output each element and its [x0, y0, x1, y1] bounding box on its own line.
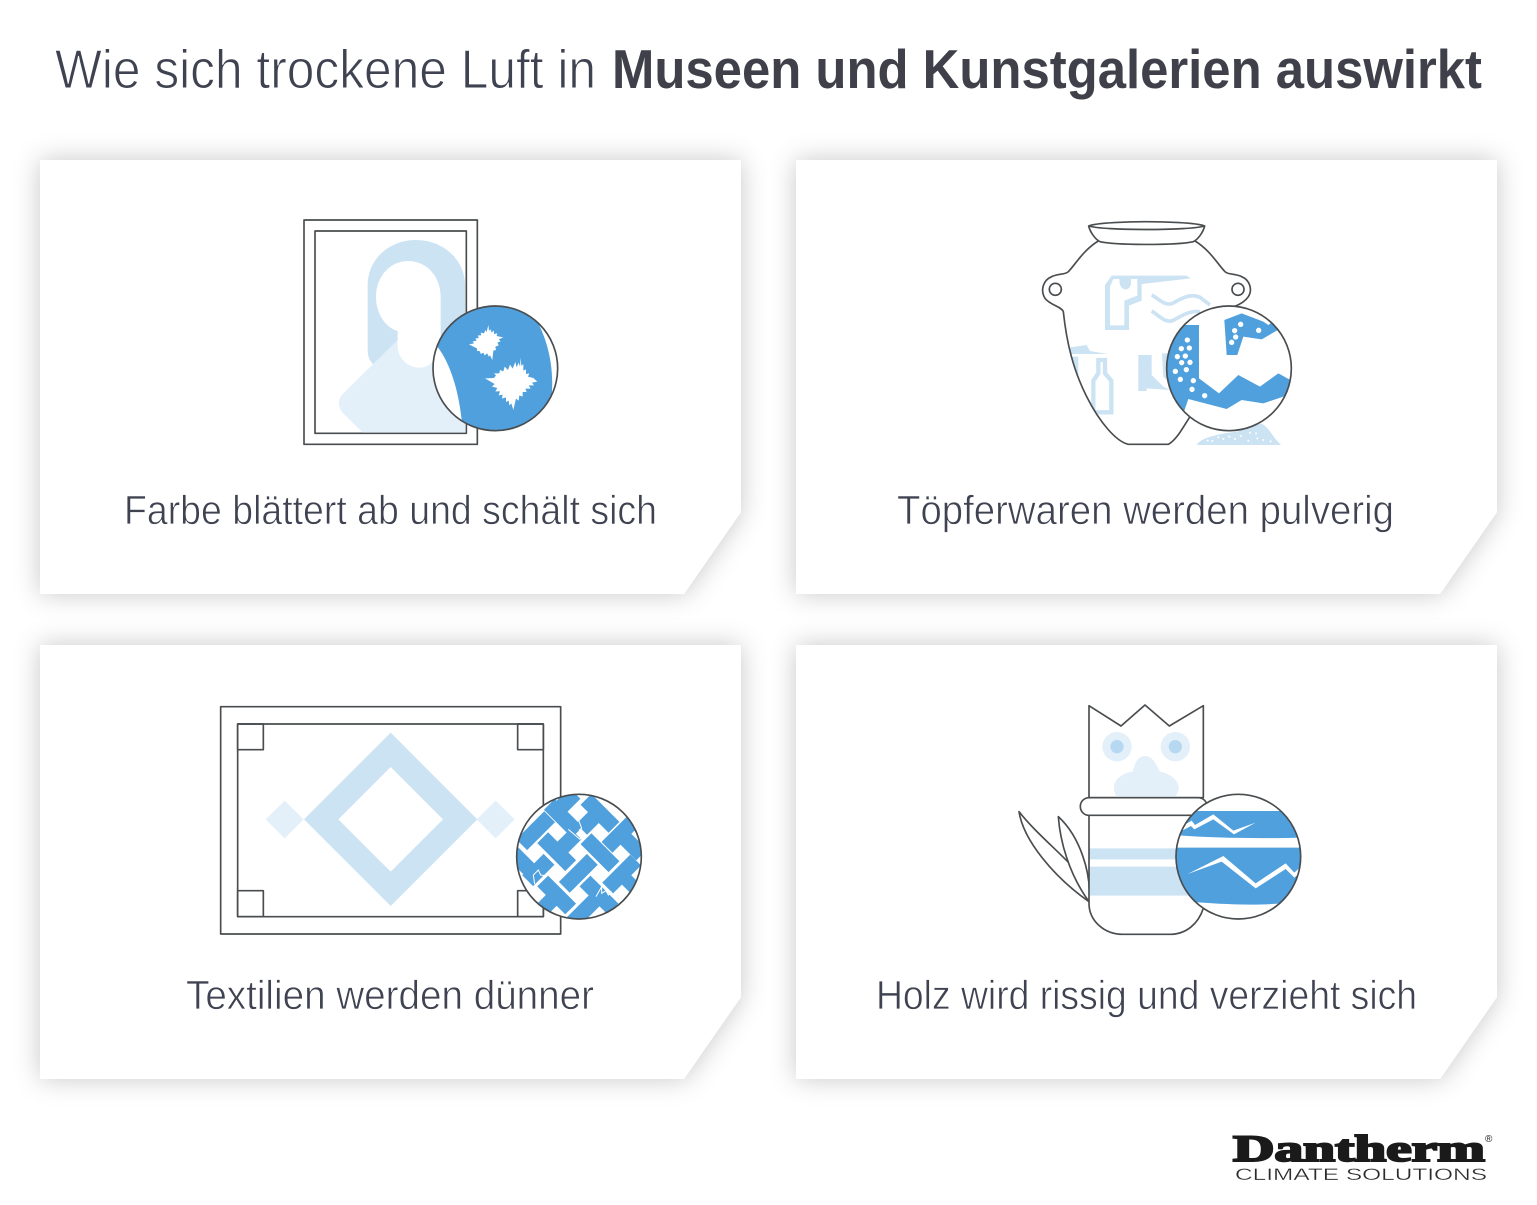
- panel: wood: [796, 645, 1497, 1079]
- title: [55, 38, 1482, 100]
- icon: carpet with magnified thinning weave: [221, 707, 642, 934]
- icon: wooden figure with magnified cracks: [1019, 705, 1303, 934]
- caption: textiles: Textilien werden dünner: [186, 972, 594, 1018]
- caption: pottery: Töpferwaren werden pulverig: [897, 487, 1394, 533]
- panel: paint: [40, 160, 741, 594]
- title: Museen und Kunstgalerien auswirkt: [612, 38, 1482, 100]
- logo: Dantherm Climate Solutions: Dantherm: [1233, 1129, 1485, 1170]
- caption: wood: Holz wird rissig und verzieht sich: [876, 972, 1417, 1018]
- panel: pottery: [796, 160, 1497, 594]
- title: Wie sich trockene Luft in: [55, 38, 596, 100]
- logo: Dantherm Climate Solutions: CLIMATE SOLUTIONS: [1235, 1165, 1487, 1184]
- icon: vase with magnified powdery surface: [1043, 222, 1293, 445]
- logo: Dantherm Climate Solutions: [1233, 1129, 1493, 1184]
- panel: textiles: [40, 645, 741, 1079]
- icon: painting with magnified flaking paint: [304, 220, 558, 444]
- caption: paint: Farbe blättert ab und schält sich: [124, 487, 657, 533]
- logo: Dantherm Climate Solutions: ®: [1485, 1134, 1493, 1145]
